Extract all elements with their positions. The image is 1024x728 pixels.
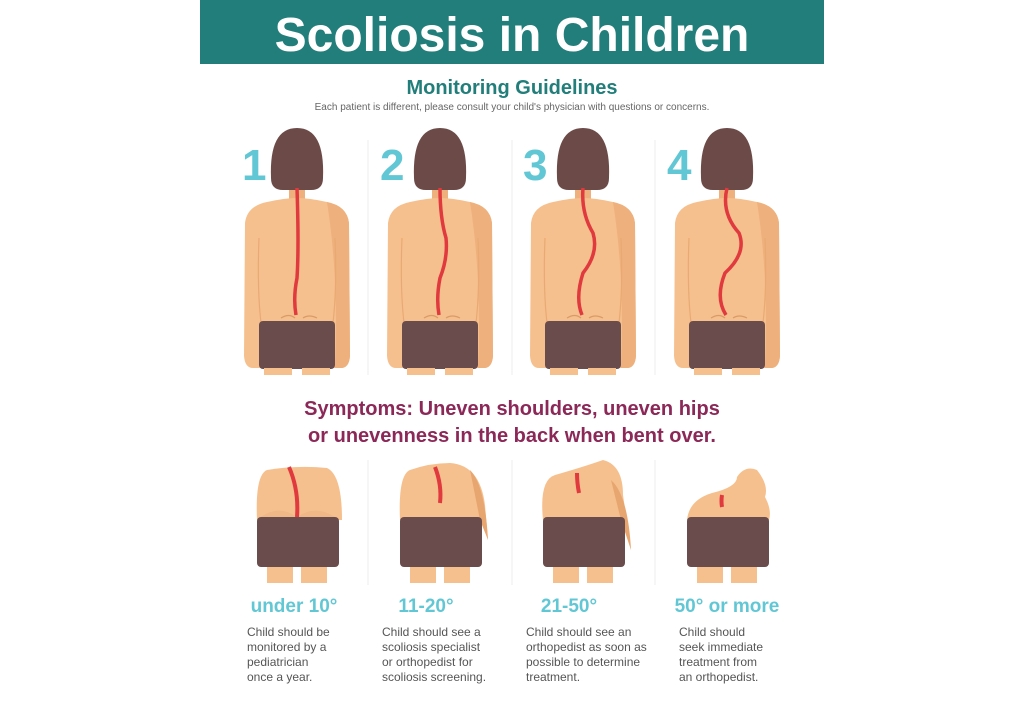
symptoms text: or unevenness in the back when bent over. — [308, 425, 716, 447]
descriptions: Child should see an — [526, 625, 631, 639]
descriptions — [247, 625, 763, 684]
figure 4 standing — [667, 128, 780, 375]
bent figure 2 — [400, 463, 488, 583]
number 4: 4 — [667, 141, 692, 190]
bent figure 1 — [257, 467, 342, 583]
symptoms text — [304, 398, 720, 447]
number 3: 3 — [523, 141, 547, 190]
bent figure 3 — [542, 460, 631, 583]
descriptions: Child should — [679, 625, 745, 639]
descriptions: seek immediate — [679, 640, 763, 654]
subtitle heading: Monitoring Guidelines — [406, 77, 618, 99]
figure 3 standing — [523, 128, 636, 375]
degree labels: 21-50° — [541, 596, 597, 617]
descriptions: an orthopedist. — [679, 670, 758, 684]
title banner — [200, 0, 824, 64]
degree labels — [251, 596, 779, 617]
figure 1 standing — [242, 128, 350, 375]
descriptions: orthopedist as soon as — [526, 640, 647, 654]
number 1: 1 — [242, 141, 266, 190]
descriptions: scoliosis screening. — [382, 670, 486, 684]
descriptions: Child should be — [247, 625, 330, 639]
descriptions: or orthopedist for — [382, 655, 473, 669]
descriptions: scoliosis specialist — [382, 640, 481, 654]
degree labels: under 10° — [251, 596, 337, 617]
descriptions: Child should see a — [382, 625, 481, 639]
figure 2 standing — [380, 128, 493, 375]
descriptions: monitored by a — [247, 640, 327, 654]
descriptions: treatment from — [679, 655, 757, 669]
descriptions: treatment. — [526, 670, 580, 684]
descriptions: once a year. — [247, 670, 312, 684]
descriptions: possible to determine — [526, 655, 640, 669]
descriptions: pediatrician — [247, 655, 308, 669]
disclaimer text: Each patient is different, please consult your child's physician with questions or concerns. — [315, 102, 709, 113]
degree labels: 11-20° — [398, 596, 454, 617]
degree labels: 50° or more — [675, 596, 779, 617]
symptoms text: Symptoms: Uneven shoulders, uneven hips — [304, 398, 720, 420]
number 2: 2 — [380, 141, 404, 190]
bent figure 4 — [687, 469, 770, 583]
title banner: Scoliosis in Children — [275, 9, 749, 62]
